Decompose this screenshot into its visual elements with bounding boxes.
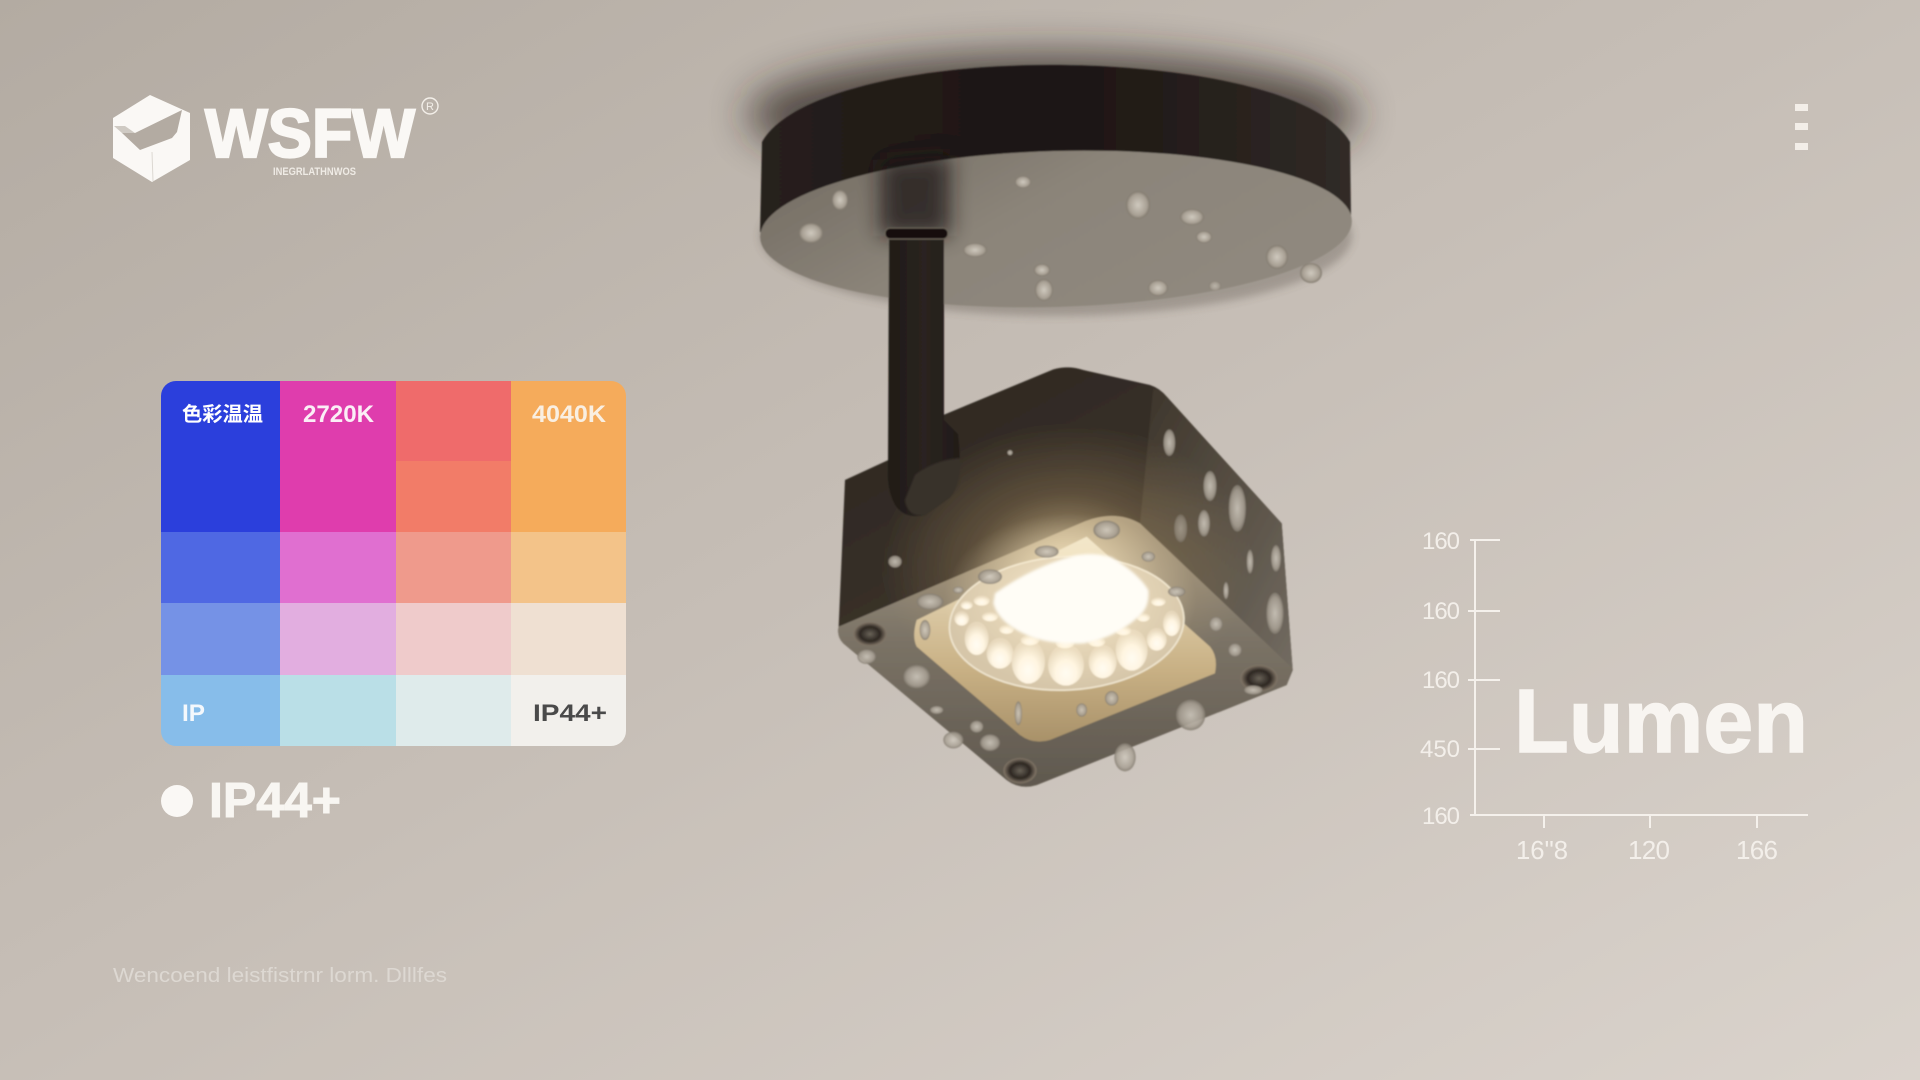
y axis labels: 450 <box>1420 736 1460 763</box>
lumen chart <box>1420 528 1808 865</box>
water drops on head <box>857 429 1284 771</box>
disc side band <box>760 65 1351 300</box>
wordmark: WSFW <box>205 95 416 172</box>
Lumen heading: Lumen <box>1514 672 1808 772</box>
x axis labels <box>1516 835 1778 865</box>
stem tube <box>888 236 960 516</box>
IP44+ badge <box>161 774 341 828</box>
menu icon <box>1795 104 1808 150</box>
logo <box>113 95 438 182</box>
x axis labels: 166 <box>1736 835 1778 865</box>
warm glow on body <box>901 437 1226 624</box>
disc underside <box>758 143 1354 315</box>
swatch heading: 色彩温温 <box>182 403 263 426</box>
soft shadow below disc <box>760 156 1352 316</box>
head body <box>838 367 1293 787</box>
head right side <box>1140 388 1293 670</box>
ceiling shadow of mount <box>747 53 1357 177</box>
knuckle <box>905 458 960 515</box>
y axis labels: 160 <box>1422 803 1460 830</box>
registered mark <box>422 98 438 114</box>
y axis labels <box>1420 528 1460 830</box>
y axis labels: 160 <box>1422 667 1460 694</box>
ceiling mount disc <box>758 65 1354 316</box>
icon: hexagon box <box>113 95 190 182</box>
label 4040K: 4040K <box>532 401 607 428</box>
x axis labels: 120 <box>1628 835 1670 865</box>
collar <box>885 228 948 239</box>
axes and ticks <box>1468 540 1808 828</box>
logo tagline: INEGRLATHNWOS <box>273 166 356 178</box>
LED lens <box>946 551 1187 696</box>
arm stem <box>885 228 960 516</box>
bright LED core <box>993 554 1149 644</box>
lamp illustration <box>758 65 1354 787</box>
recess opening <box>914 537 1216 742</box>
label 2720K: 2720K <box>303 401 375 428</box>
label IP: IP <box>182 700 205 727</box>
y axis labels: 160 <box>1422 528 1460 555</box>
x axis labels: 16"8 <box>1516 835 1568 865</box>
y axis labels: 160 <box>1422 598 1460 625</box>
badge label: IP44+ <box>209 774 341 828</box>
swatch cells <box>161 381 626 746</box>
LED ring <box>954 596 1180 686</box>
stem shadow on disc <box>880 155 950 236</box>
bullet <box>161 785 193 817</box>
front face <box>838 516 1293 787</box>
water drops on disc <box>799 176 1322 301</box>
panel: colour temperature swatch grid <box>161 381 626 746</box>
footnote: Wencoend leistfistrnr lorm. Dlllfes <box>113 965 447 987</box>
lamp head <box>838 367 1293 787</box>
label IP44+ in grid: IP44+ <box>533 700 607 727</box>
registered mark: R <box>426 101 434 113</box>
corner screws <box>853 622 1278 783</box>
LED bloom <box>943 513 1197 687</box>
